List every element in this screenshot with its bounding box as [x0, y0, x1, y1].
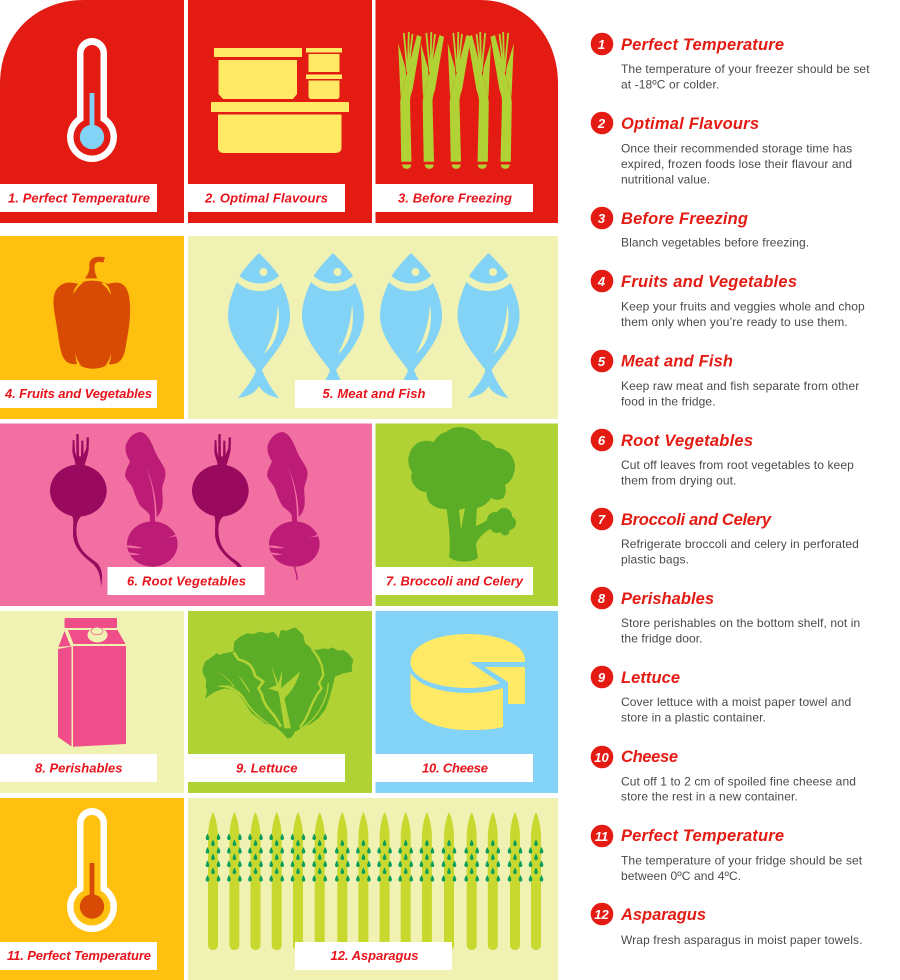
tip 9: Lettuce: Cover lettuce with a moist paper towel and: [621, 695, 851, 709]
label: Perfect Temperature: 11. Perfect Temperature: [7, 948, 151, 963]
tip 2: Optimal Flavours: Once their recommended storage time has: [621, 142, 852, 156]
tip 12: Asparagus: [591, 903, 863, 947]
label: Broccoli and Celery: 7. Broccoli and Celery: [386, 574, 524, 588]
tip 11: Perfect Temperature: Perfect Temperature: [621, 827, 784, 845]
label: Optimal Flavours: [188, 184, 345, 212]
tip 11: Perfect Temperature: The temperature of your fridge should be set: [621, 853, 863, 867]
tip 8: Perishables: Store perishables on the bottom shelf, not in: [621, 616, 860, 630]
tip 2: Optimal Flavours: expired, frozen foods lose their flavour and: [621, 157, 852, 171]
tip 2: Optimal Flavours: nutritional value.: [621, 172, 710, 186]
tip 10: Cheese: Cut off 1 to 2 cm of spoiled fine cheese and: [621, 774, 856, 788]
tip 1: Perfect Temperature: at -18ºC or colder.: [621, 78, 719, 92]
icon: four fish: [228, 253, 520, 398]
icon: bell pepper: [53, 257, 130, 369]
tip 7: Broccoli and Celery: Refrigerate broccoli and celery in perforated: [621, 537, 859, 551]
tip 4: Fruits and Vegetables: Keep your fruits and veggies whole and chop: [621, 300, 865, 314]
tip 9: Lettuce: 9: [598, 670, 606, 685]
label: Fruits and Vegetables: 4. Fruits and Vegetables: [4, 386, 152, 401]
tip 4: Fruits and Vegetables: 4: [597, 274, 606, 289]
label: Optimal Flavours: 2. Optimal Flavours: [204, 190, 328, 206]
tip 10: Cheese: store the rest in a new container.: [621, 790, 798, 804]
panel: 7. Broccoli and Celery: [376, 424, 558, 606]
tip 3: Before Freezing: Before Freezing: [621, 210, 748, 228]
tip 7: Broccoli and Celery: 7: [598, 512, 606, 527]
tip 1: Perfect Temperature: Perfect Temperature: [621, 36, 784, 54]
panel: 4. Fruits and Vegetables: [0, 236, 184, 419]
icon: stacked storage containers: [211, 48, 349, 153]
icon: milk carton: [58, 618, 126, 747]
label: Perishables: [0, 754, 157, 782]
icon: asparagus spears: [206, 812, 543, 950]
panel: 1. Perfect Temperature: [0, 0, 184, 223]
tip 1: Perfect Temperature: [591, 33, 870, 92]
panel: 2. Optimal Flavours: [188, 0, 372, 223]
label: Cheese: [376, 754, 533, 782]
tip 3: Before Freezing: Blanch vegetables before freezing.: [621, 236, 809, 250]
label: Before Freezing: 3. Before Freezing: [398, 190, 512, 206]
tip 5: Meat and Fish: food in the fridge.: [621, 394, 716, 408]
label: Root Vegetables: [108, 567, 264, 595]
tip 7: Broccoli and Celery: plastic bags.: [621, 552, 689, 566]
panel: 8. Perishables: [0, 611, 184, 793]
tip 7: Broccoli and Celery: [591, 508, 859, 566]
label: Meat and Fish: 5. Meat and Fish: [322, 386, 426, 401]
tip 9: Lettuce: Lettuce: [621, 669, 680, 687]
tip 11: Perfect Temperature: [591, 825, 863, 883]
label: Root Vegetables: 6. Root Vegetables: [127, 574, 246, 588]
tip 12: Asparagus: 12: [594, 907, 609, 922]
tip 9: Lettuce: [591, 666, 851, 724]
panel: 12. Asparagus: [188, 798, 558, 980]
tip 6: Root Vegetables: 6: [598, 433, 606, 448]
tip 10: Cheese: [591, 746, 856, 804]
label: Fruits and Vegetables: [0, 380, 157, 408]
label: Perfect Temperature: [0, 942, 157, 970]
tip 8: Perishables: Perishables: [621, 590, 714, 608]
tip 11: Perfect Temperature: between 0ºC and 4ºC.: [621, 869, 741, 883]
label: Broccoli and Celery: [376, 567, 533, 595]
panel: 9. Lettuce: [188, 611, 372, 793]
tip 6: Root Vegetables: Cut off leaves from root vegetables to keep: [621, 458, 854, 472]
tip 4: Fruits and Vegetables: Fruits and Vegetables: [621, 273, 797, 291]
panel: 11. Perfect Temperature: [0, 798, 184, 980]
panel: 3. Before Freezing: [376, 0, 558, 223]
label: Perfect Temperature: 1. Perfect Temperature: [8, 190, 150, 206]
label: Perfect Temperature: [0, 184, 157, 212]
label: Before Freezing: [376, 184, 533, 212]
tip 7: Broccoli and Celery: Broccoli and Celery: [621, 511, 772, 529]
tip 9: Lettuce: store in a plastic container.: [621, 710, 766, 724]
label: Lettuce: 9. Lettuce: [236, 760, 298, 776]
tip 2: Optimal Flavours: Optimal Flavours: [621, 115, 759, 133]
tip 2: Optimal Flavours: [591, 112, 852, 186]
tip 2: Optimal Flavours: 2: [597, 116, 606, 131]
tip 10: Cheese: 10: [594, 750, 609, 765]
tip 5: Meat and Fish: Keep raw meat and fish separate from other: [621, 379, 859, 393]
tip 1: Perfect Temperature: The temperature of your freezer should be set: [621, 62, 870, 76]
tip 4: Fruits and Vegetables: them only when you’re ready to use them.: [621, 315, 848, 329]
icon: leeks: [398, 32, 514, 169]
tip 12: Asparagus: Asparagus: [620, 906, 706, 924]
label: Lettuce: [188, 754, 345, 782]
tip 6: Root Vegetables: them from drying out.: [621, 474, 736, 488]
tip 1: Perfect Temperature: 1: [598, 37, 605, 52]
icon: freezer thermometer: [67, 38, 117, 162]
tip 6: Root Vegetables: [591, 429, 854, 488]
icon: lettuce: [202, 627, 353, 739]
label: Perishables: 8. Perishables: [35, 760, 122, 776]
tip 8: Perishables: [591, 587, 860, 646]
tip 3: Before Freezing: 3: [598, 211, 606, 226]
label: Cheese: 10. Cheese: [422, 760, 488, 776]
tip 10: Cheese: Cheese: [621, 748, 678, 766]
tip 6: Root Vegetables: Root Vegetables: [621, 432, 753, 450]
tip 12: Asparagus: Wrap fresh asparagus in moist paper towels.: [621, 933, 863, 947]
tip 5: Meat and Fish: 5: [598, 354, 606, 369]
tip 4: Fruits and Vegetables: [591, 270, 865, 329]
tip 5: Meat and Fish: [591, 350, 859, 408]
tip 3: Before Freezing: [591, 207, 809, 250]
panel: 10. Cheese: [376, 611, 558, 793]
icon: cheese wheel: [410, 634, 525, 730]
icon: broccoli: [408, 427, 516, 562]
panel: 6. Root Vegetables: [0, 424, 372, 606]
icon: fridge thermometer: [67, 808, 117, 932]
tip 5: Meat and Fish: Meat and Fish: [621, 352, 733, 370]
tip 8: Perishables: the fridge door.: [621, 632, 703, 646]
tip 11: Perfect Temperature: 11: [595, 829, 608, 844]
label: Meat and Fish: [295, 380, 452, 408]
icon: beetroots: [50, 432, 320, 586]
panel: 5. Meat and Fish: [188, 236, 558, 419]
tip 8: Perishables: 8: [598, 591, 606, 606]
label: Asparagus: [295, 942, 452, 970]
label: Asparagus: 12. Asparagus: [330, 948, 418, 963]
